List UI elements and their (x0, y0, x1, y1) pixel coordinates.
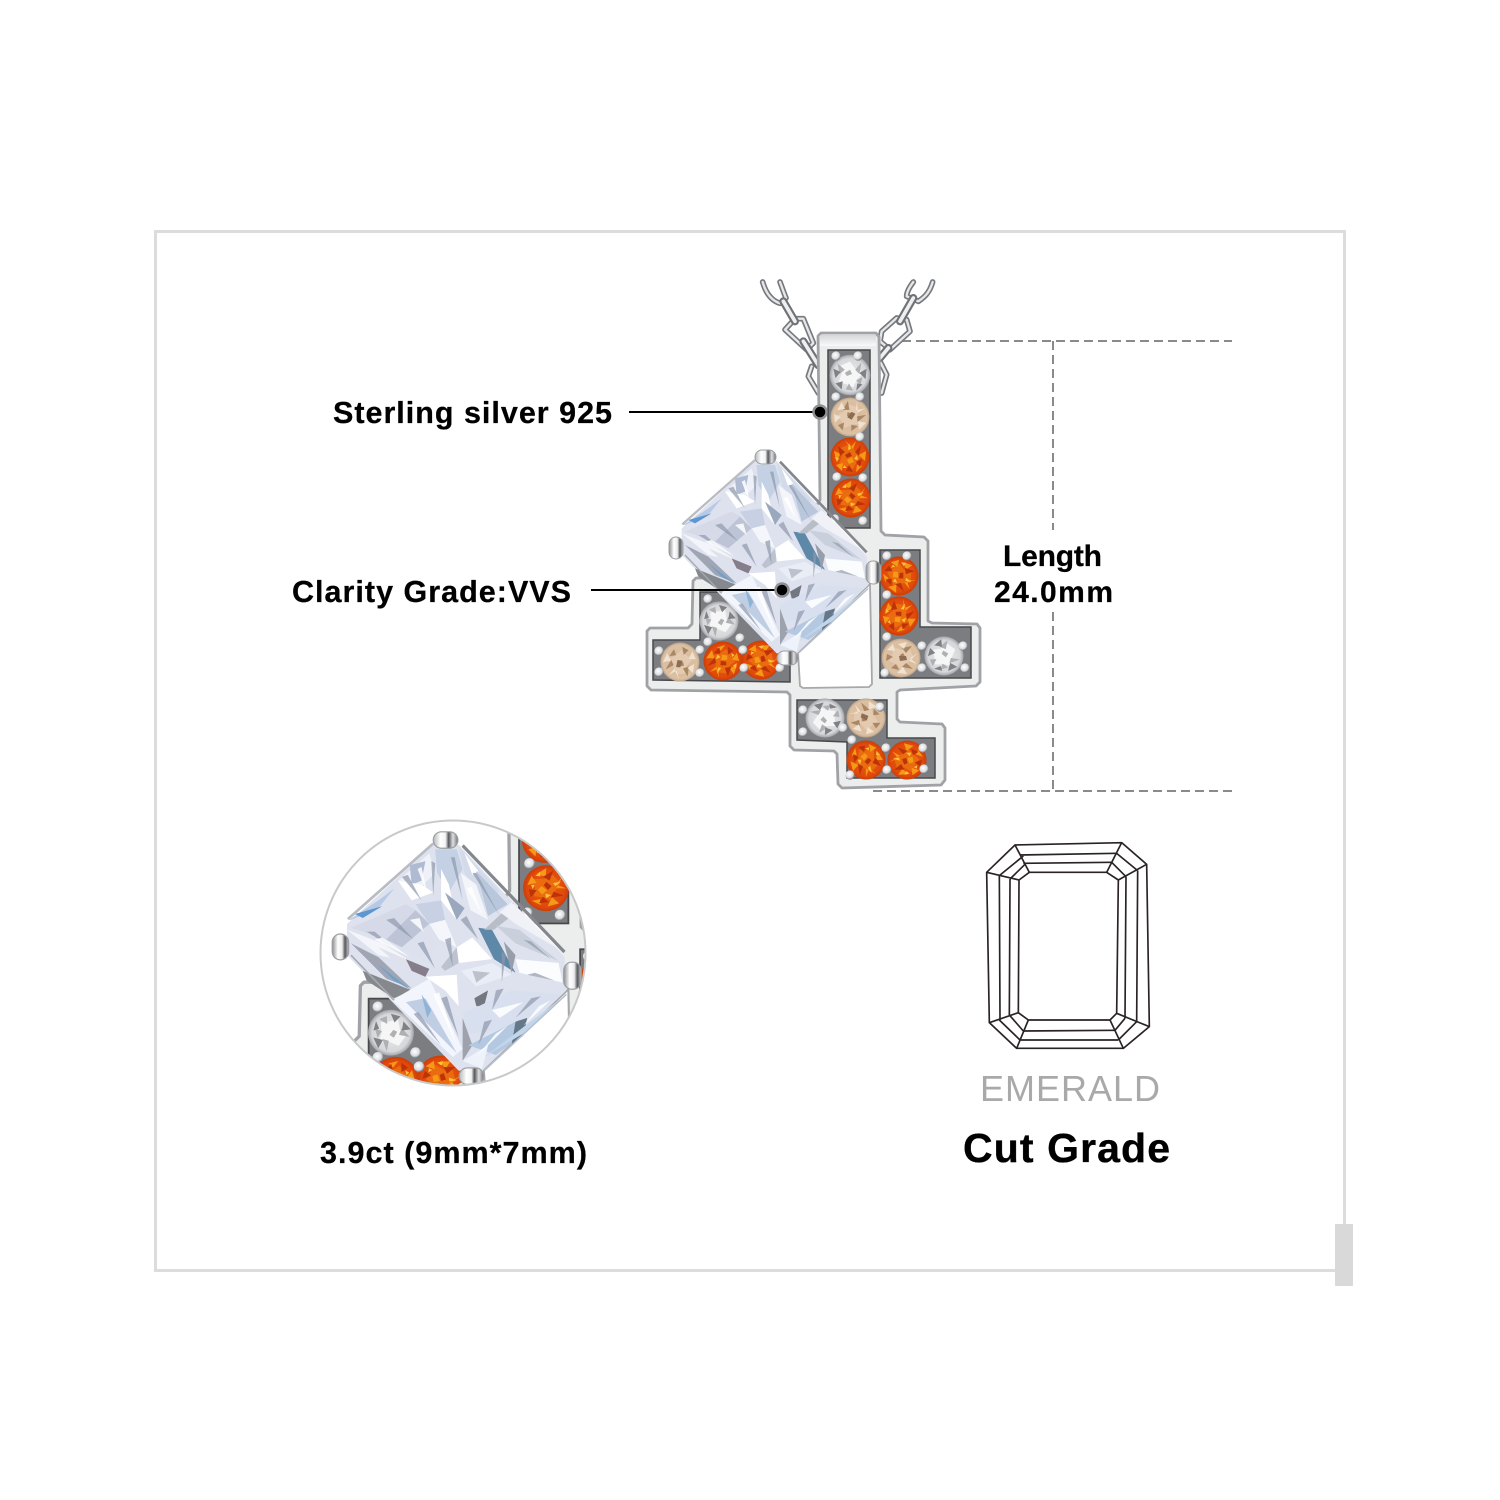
emerald label: EMERALD (980, 1068, 1160, 1109)
dimension lines (873, 341, 1232, 791)
length label: 24.0mm (994, 576, 1113, 609)
frame (156, 232, 1344, 1270)
icon: emerald cut diagram (987, 843, 1149, 1048)
zoomed stone circle (320, 820, 586, 1086)
carat label: 3.9ct (9mm*7mm) (320, 1136, 587, 1170)
callout: sterling silver: Sterling silver 925 (333, 396, 612, 430)
pendant photo (647, 282, 980, 788)
cut grade label: Cut Grade (963, 1125, 1170, 1171)
corner tab (1335, 1224, 1353, 1286)
length label (994, 540, 1113, 609)
callout: clarity grade (292, 575, 788, 609)
length label: Length (1003, 540, 1102, 573)
callout: sterling silver (333, 396, 826, 430)
callout: clarity grade: Clarity Grade:VVS (292, 575, 571, 609)
